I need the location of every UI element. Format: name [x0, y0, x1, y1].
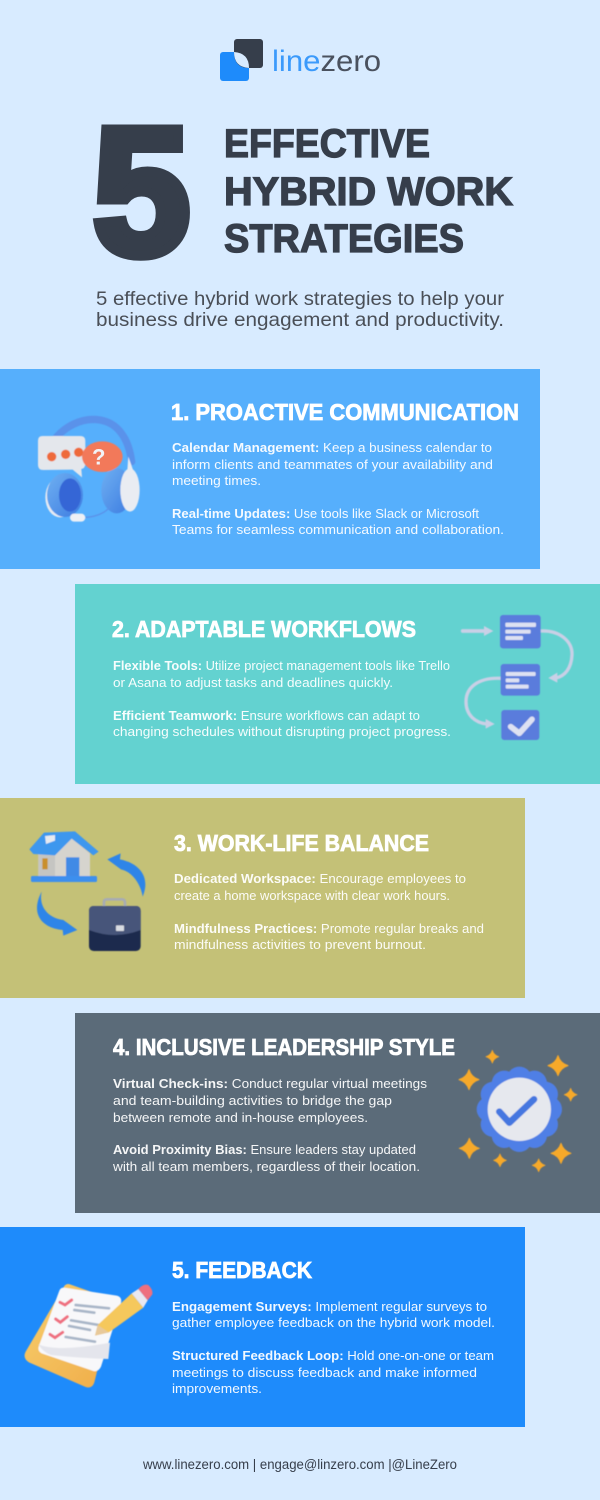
- icon: logo mark: [220, 39, 263, 81]
- text block: flexible tools: [113, 658, 450, 690]
- text block: calendar management: inform clients and teammates of your availability and: [172, 457, 493, 472]
- text block: mindfulness practices: mindfulness activities to prevent burnout.: [174, 937, 426, 952]
- text block: calendar management: [172, 440, 493, 488]
- heading: feedback: 5. FEEDBACK: [172, 1257, 312, 1283]
- logo: [220, 39, 381, 81]
- text block: engagement surveys: [172, 1299, 495, 1330]
- heading: work-life balance: 3. WORK-LIFE BALANCE: [174, 830, 429, 856]
- text block: avoid proximity bias: Avoid Proximity Bias: Ensure leaders stay updated: [113, 1142, 416, 1157]
- text block: mindfulness practices: [174, 921, 484, 952]
- text block: efficient teamwork: [113, 708, 451, 739]
- text block: structured feedback loop: meetings to discuss feedback and make informed: [172, 1365, 477, 1380]
- text block: calendar management: Calendar Management: Keep a business calendar to: [172, 440, 492, 455]
- text block: dedicated workspace: [174, 871, 466, 903]
- text block: structured feedback loop: improvements.: [172, 1381, 262, 1396]
- icon: headset with speech bubbles: ?: [92, 445, 105, 470]
- subtitle: business drive engagement and productivity.: [96, 309, 504, 331]
- subtitle: 5 effective hybrid work strategies to help your: [96, 288, 505, 310]
- text block: flexible tools: or Asana to adjust tasks and deadlines quickly.: [113, 675, 393, 690]
- text block: structured feedback loop: Structured Feedback Loop: Hold one-on-one or team: [172, 1348, 494, 1363]
- text block: structured feedback loop: [172, 1348, 494, 1396]
- text block: engagement surveys: gather employee feedback on the hybrid work model.: [172, 1315, 495, 1330]
- text block: flexible tools: Flexible Tools: Utilize project management tools like Trello: [113, 658, 450, 673]
- icon: checklist and pencil: [25, 1284, 152, 1387]
- text block: virtual check-ins: between remote and in-house employees.: [113, 1110, 368, 1125]
- text block: engagement surveys: Engagement Surveys: Implement regular surveys to: [172, 1299, 487, 1314]
- text block: virtual check-ins: and team-building activities to bridge the gap: [113, 1093, 392, 1108]
- text block: efficient teamwork: changing schedules without disrupting project progress.: [113, 724, 451, 739]
- icon: home and briefcase cycle: [29, 831, 145, 951]
- title: [224, 122, 513, 261]
- text block: mindfulness practices: Mindfulness Practices: Promote regular breaks and: [174, 921, 484, 936]
- title: EFFECTIVE: [224, 122, 430, 166]
- title: HYBRID WORK: [224, 170, 513, 214]
- panel: 2 adaptable workflows: [75, 584, 600, 784]
- panel: 4 inclusive leadership style: [75, 1013, 600, 1213]
- text block: efficient teamwork: Efficient Teamwork: Ensure workflows can adapt to: [113, 708, 420, 723]
- heading: adaptable workflows: 2. ADAPTABLE WORKFLOWS: [112, 616, 416, 642]
- panel: 3 work-life balance: [0, 798, 525, 998]
- text block: real-time updates: [172, 506, 504, 537]
- heading: inclusive leadership style: 4. INCLUSIVE LEADERSHIP STYLE: [113, 1034, 455, 1060]
- text block: virtual check-ins: [113, 1076, 427, 1125]
- panel: 1 proactive communication: [0, 369, 540, 569]
- big number 5: 5: [93, 91, 190, 293]
- panel: 5 feedback: [0, 1227, 525, 1427]
- heading: proactive communication: 1. PROACTIVE COMMUNICATION: [171, 399, 519, 425]
- text block: avoid proximity bias: with all team members, regardless of their location.: [112, 1159, 420, 1174]
- text block: real-time updates: Real-time Updates: Use tools like Slack or Microsoft: [172, 506, 479, 521]
- icon: workflow steps: [463, 615, 572, 740]
- subtitle: [96, 288, 505, 331]
- title: STRATEGIES: [224, 217, 464, 261]
- icon: verified badge with sparkles: [459, 1050, 577, 1172]
- text block: avoid proximity bias: [112, 1142, 420, 1174]
- text block: real-time updates: Teams for seamless communication and collaboration.: [172, 522, 504, 537]
- footer contact line: www.linezero.com | engage@linzero.com |@LineZero: [142, 1457, 457, 1472]
- text block: dedicated workspace: Dedicated Workspace: Encourage employees to: [174, 871, 466, 886]
- logo wordmark: linezero: [272, 45, 381, 78]
- text block: virtual check-ins: Virtual Check-ins: Conduct regular virtual meetings: [113, 1076, 427, 1091]
- text block: dedicated workspace: create a home workspace with clear work hours.: [174, 888, 450, 903]
- icon: headset with speech bubbles: [38, 419, 140, 522]
- text block: calendar management: meeting times.: [172, 473, 261, 488]
